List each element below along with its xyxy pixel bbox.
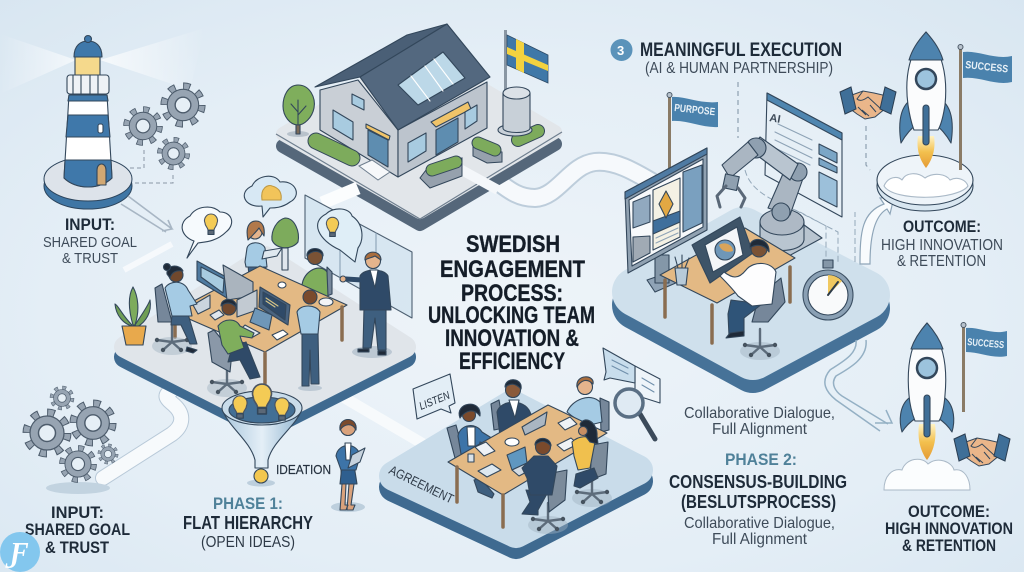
text: collaborative dialogue (684, 405, 835, 438)
laptops (193, 295, 272, 337)
title: ENGAGEMENT (440, 256, 585, 283)
text: outcome bottom: OUTCOME: (908, 502, 990, 521)
rocket (900, 323, 954, 437)
light beams (0, 28, 205, 94)
road: lower left path fill (103, 390, 181, 478)
arrow: lighthouse to phase 1 (121, 196, 172, 232)
person: standing woman with tablet (331, 420, 365, 512)
text: input bottom: INPUT: (51, 503, 104, 522)
icon: bottom left gears (26, 388, 117, 494)
text: input top (43, 216, 137, 267)
plant (115, 287, 150, 345)
desk plant (272, 218, 298, 270)
text: input top: INPUT: (65, 216, 115, 234)
text: phase 2: Collaborative Dialogue, (684, 515, 835, 532)
thought bubble: left (182, 207, 232, 258)
dashed connectors (738, 82, 870, 170)
icon: success flag: SUCCESS (965, 59, 1009, 75)
text: collaborative dialogue: Full Alignment (712, 421, 808, 438)
icon: purpose flag (667, 92, 718, 168)
title: SWEDISH (466, 231, 560, 258)
icon: success flag (961, 322, 1007, 412)
title: UNLOCKING TEAM (428, 302, 595, 329)
text: input top: & TRUST (62, 250, 118, 267)
house platform (276, 52, 562, 224)
person: standing woman with tablet (245, 221, 282, 287)
icon: magnifying glass (615, 389, 655, 439)
road: phase 1 to phase 2 (343, 397, 425, 445)
person: man in dark suit (491, 380, 536, 436)
desktop monitor (625, 148, 707, 292)
text: phase 2: (BESLUTSPROCESS) (681, 492, 836, 512)
arrow: phase 3 to lower outcome (825, 340, 892, 431)
icon: top handshake (840, 87, 896, 119)
platform slab (394, 405, 638, 544)
panel: bottom rocket outcome (884, 322, 1007, 490)
panel: phase 2 platform (387, 348, 660, 544)
title: PROCESS: (461, 280, 563, 307)
icon: purpose flag: PURPOSE (674, 102, 716, 118)
thought bubble: top (244, 176, 296, 217)
smoke cloud (884, 459, 970, 490)
panel: lighthouse input (44, 36, 132, 209)
text: phase 1: FLAT HIERARCHY (183, 513, 313, 533)
text: phase 1: (OPEN IDEAS) (201, 534, 295, 551)
text: input bottom: & TRUST (45, 538, 110, 557)
icon: top left gears (126, 86, 202, 183)
person: woman in yellow (572, 420, 612, 507)
laptop (507, 447, 534, 476)
title: EFFICIENCY (459, 348, 565, 375)
text: phase 3 heading (610, 39, 842, 77)
launch pad (877, 155, 973, 211)
text: phase 2: Full Alignment (712, 531, 808, 548)
platform slab (125, 257, 405, 428)
platform slab (637, 232, 865, 368)
panel: swedish house (276, 24, 562, 224)
title (428, 231, 595, 375)
decorative white strip (124, 244, 172, 270)
rocket (900, 32, 952, 145)
text: input bottom (25, 503, 130, 557)
flame (918, 424, 936, 460)
icon: logo badge (0, 532, 40, 572)
icon: bottom handshake (954, 434, 1010, 466)
hedges and steps (316, 131, 538, 188)
pencil cup (675, 255, 689, 285)
text: outcome top (881, 218, 1003, 270)
icon: speech bubbles (603, 348, 660, 403)
icon: ideation funnel (222, 384, 302, 486)
speech bubble: listen (413, 374, 455, 419)
panel: top rocket outcome (877, 32, 1012, 211)
text: phase 1: PHASE 1: (213, 494, 283, 513)
text: input bottom: SHARED GOAL (25, 520, 130, 539)
text: phase 3 heading: (AI & HUMAN PARTNERSHIP) (645, 60, 833, 77)
icon: swedish flag (504, 30, 548, 92)
desk (173, 266, 347, 383)
text: outcome top: OUTCOME: (903, 218, 981, 236)
icon: logo badge: Ƒ (5, 538, 29, 569)
drawing tablet (692, 217, 753, 283)
text: phase 3 heading: MEANINGFUL EXECUTION (640, 40, 842, 61)
icon: success flag (958, 44, 1012, 170)
robot arm (717, 137, 822, 258)
text: outcome top: & RETENTION (897, 253, 986, 270)
person: green shirt (302, 248, 332, 296)
monitors (197, 261, 290, 325)
AI window panel (765, 93, 842, 217)
panel: phase 3 platform (625, 92, 865, 368)
person: standing woman back (297, 290, 322, 391)
text: outcome top: HIGH INNOVATION (881, 237, 1003, 254)
text: phase 2 (669, 450, 847, 548)
person: woman in blue (447, 404, 498, 498)
icon: stopwatch (803, 260, 853, 320)
title: INNOVATION & (445, 325, 579, 352)
text: phase 3 heading: 3 (617, 43, 624, 58)
icon: success flag: SUCCESS (967, 337, 1005, 351)
tree (283, 85, 314, 137)
person: man in suit (340, 252, 392, 358)
person: designer (720, 239, 785, 360)
house body (315, 24, 490, 177)
text: outcome bottom: & RETENTION (902, 536, 996, 555)
text: phase 2: CONSENSUS-BUILDING (669, 472, 847, 492)
speech bubble: listen: LISTEN (418, 390, 452, 413)
text: collaborative dialogue: Collaborative Dialogue, (684, 405, 835, 422)
glass wall (305, 195, 412, 318)
text: phase 1 (183, 494, 313, 551)
lighthouse base (44, 157, 132, 209)
road: lower left path (103, 390, 181, 478)
flame (917, 136, 935, 168)
thought bubble: right (318, 209, 362, 262)
person: man in light blue (567, 377, 609, 432)
meeting table (448, 405, 607, 527)
text: outcome bottom (885, 502, 1013, 555)
text: ideation: IDEATION (276, 462, 331, 477)
arrow: phase 3 to outcome (860, 197, 894, 264)
text: agreement: AGREEMENT (387, 462, 456, 506)
road: house to phase 3 (490, 162, 652, 198)
AI window panel: AI (768, 112, 781, 126)
circuit lines (745, 170, 855, 262)
text: phase 2: PHASE 2: (725, 450, 797, 469)
panel: phase 1 platform (115, 176, 412, 428)
person: seated green shirt (207, 299, 260, 397)
text: input top: SHARED GOAL (43, 234, 137, 251)
road: house to phase 3 fill (490, 162, 652, 198)
person: dark suit foreground (522, 438, 568, 534)
person: seated woman left (152, 264, 197, 355)
work desk (660, 228, 795, 343)
lighthouse tower (64, 36, 112, 187)
storage tank (498, 87, 532, 136)
